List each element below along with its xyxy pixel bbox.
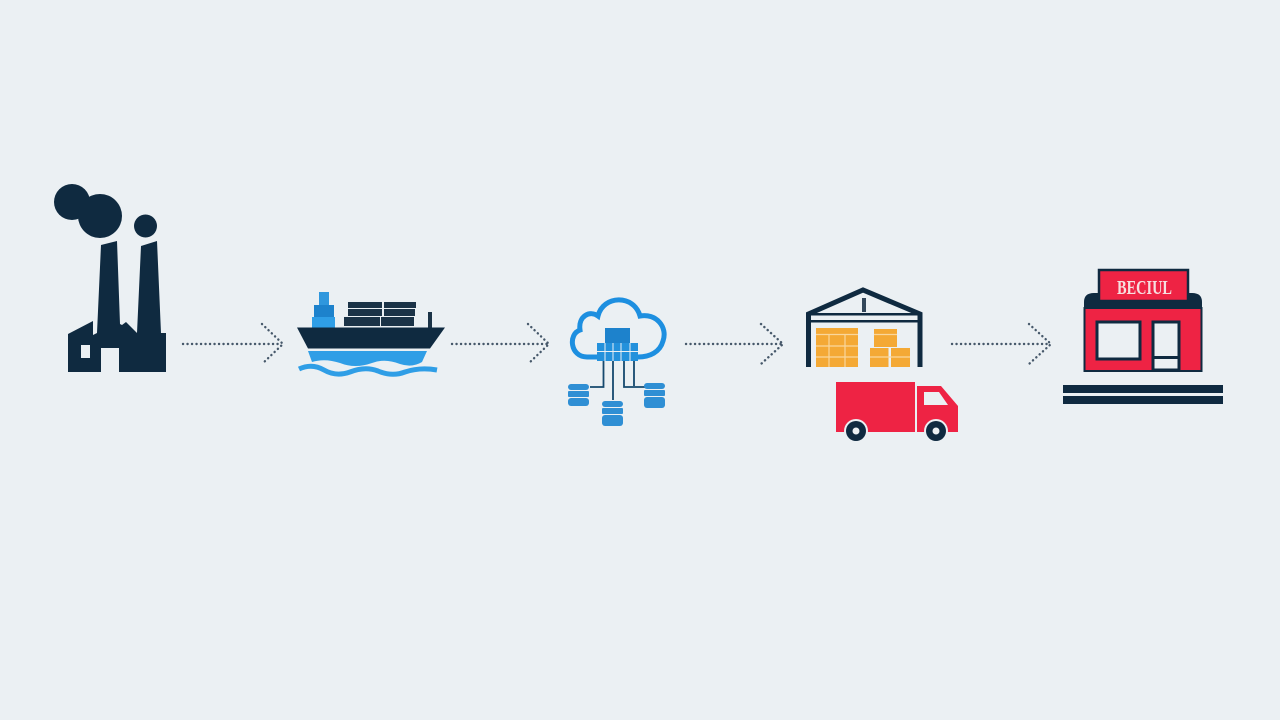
arrow: factory to ship (183, 324, 283, 364)
arrow: warehouse to store (952, 324, 1051, 364)
store ground lines (1063, 385, 1223, 404)
icon: cargo ship (297, 292, 445, 374)
icon: warehouse (808, 290, 920, 367)
arrow: cloud to warehouse (686, 324, 783, 364)
icon: delivery truck (836, 382, 958, 443)
store sign text: BECIUL (1117, 277, 1172, 299)
arrow: ship to cloud (452, 324, 549, 364)
icon: cloud data network (568, 300, 665, 426)
icon: factory (54, 184, 166, 372)
icon: retail store (1063, 270, 1223, 404)
